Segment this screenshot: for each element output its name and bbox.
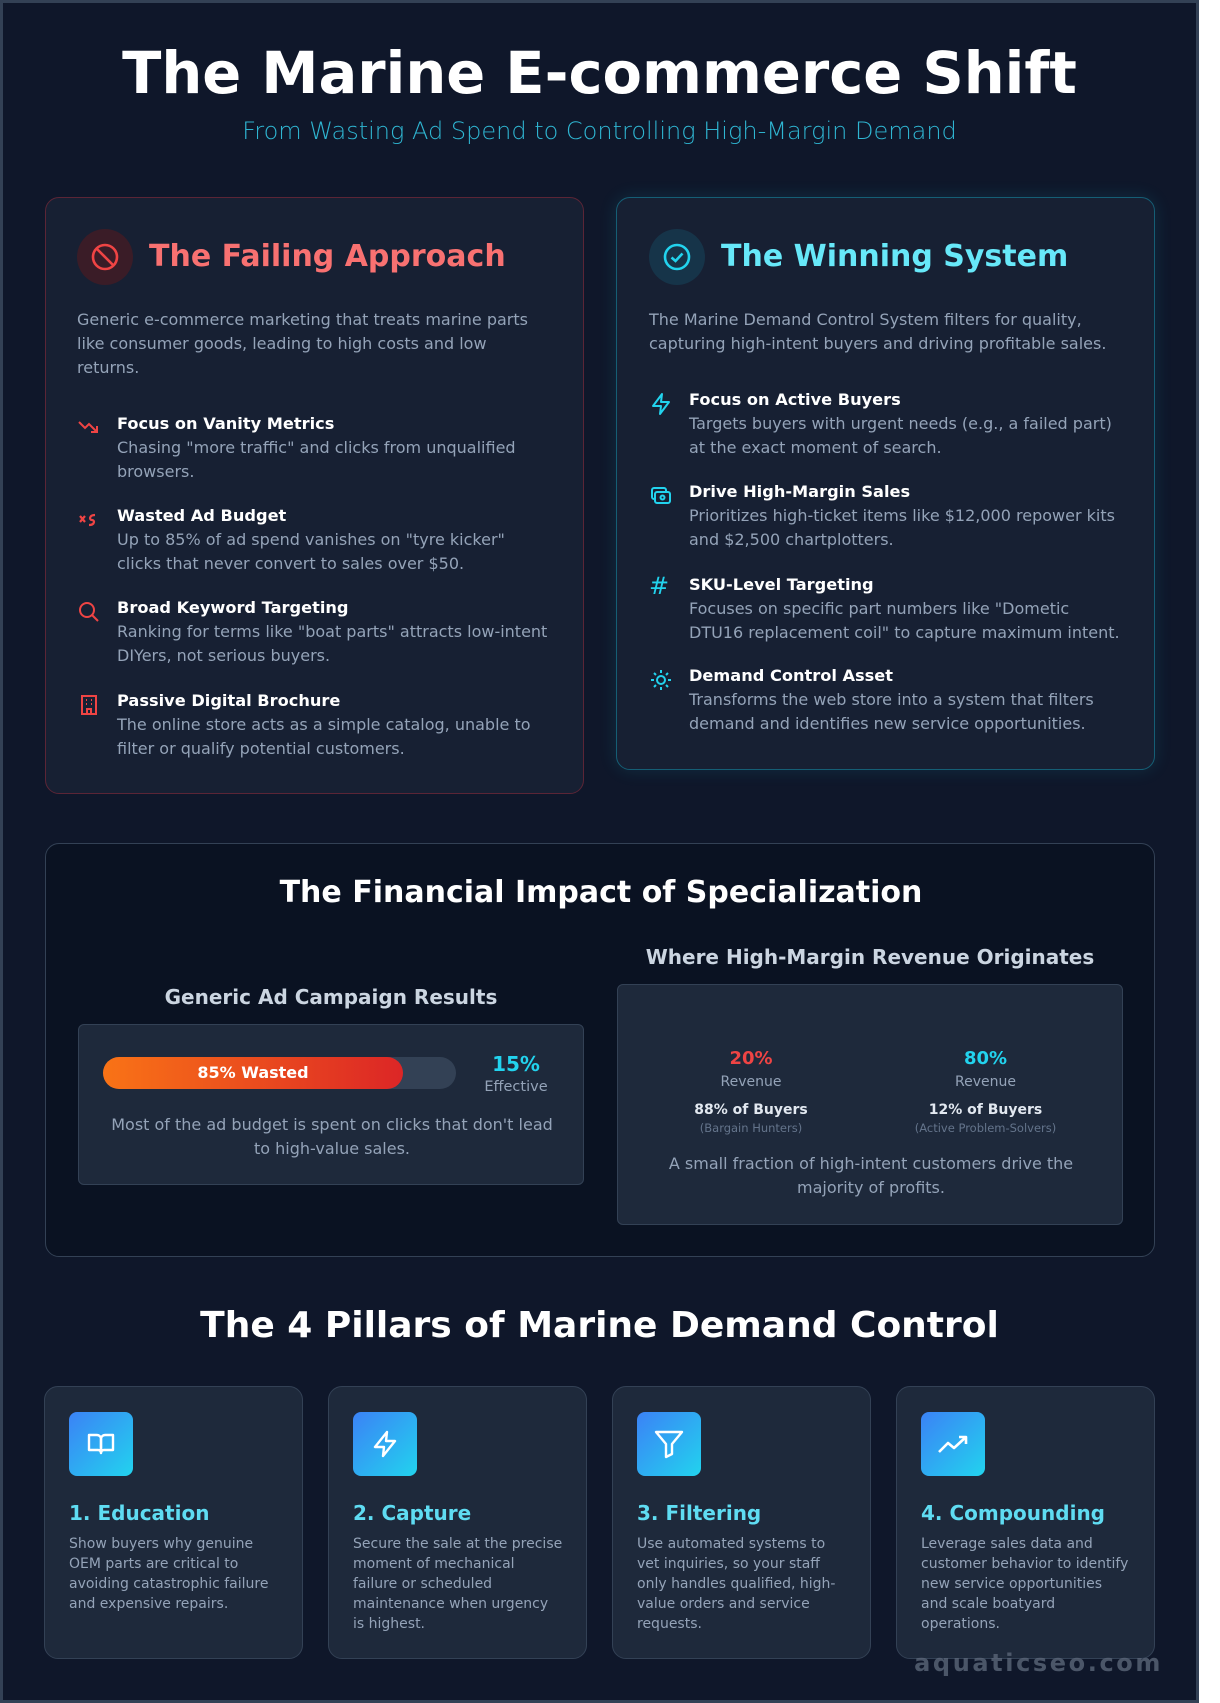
stat: active problem-solvers: (Active Problem-Solvers) [915, 1121, 1056, 1135]
icon: cash [651, 487, 671, 504]
pillar: filtering: Use automated systems to vet inquiries, so your staff only handles qualified, high-value orders and service requests. [637, 1536, 835, 1632]
stat: bargain hunters [694, 1048, 808, 1135]
pillar: compounding: Leverage sales data and customer behavior to identify new service opportunities and scale boatyard operations. [921, 1536, 1128, 1632]
stat: active problem-solvers: 80% [964, 1048, 1007, 1069]
pillar: education: 1. Education [69, 1501, 209, 1525]
caption: Most of the ad budget is spent on clicks that don't lead to high-value sales. [111, 1115, 553, 1158]
stat: active problem-solvers [915, 1048, 1056, 1135]
watermark: aquaticseo.com [914, 1649, 1163, 1677]
title: The Marine E-commerce Shift [122, 40, 1077, 107]
panel: financial impact [45, 843, 1155, 1257]
item: vanity metrics: Focus on Vanity Metrics [117, 414, 334, 433]
item: passive brochure: The online store acts as a simple catalog, unable to filter or qualify potential customers. [117, 715, 531, 758]
icon: trending up [921, 1412, 985, 1476]
item: active buyers [652, 390, 1112, 457]
chart: wasted bar box [78, 1024, 584, 1185]
pillar: capture [328, 1386, 587, 1659]
heading: The Financial Impact of Specialization [280, 875, 922, 910]
item: wasted budget [79, 506, 505, 573]
icon: bolt [353, 1412, 417, 1476]
caption: A small fraction of high-intent customers drive the majority of profits. [669, 1154, 1073, 1197]
heading: The Failing Approach [149, 239, 506, 274]
pillar: filtering [612, 1386, 871, 1659]
chart: revenue split box [617, 984, 1123, 1225]
item: demand control: Demand Control Asset [689, 666, 893, 685]
item: high margin [651, 482, 1115, 549]
panel: failing approach [45, 197, 584, 794]
subheading: generic campaign: Generic Ad Campaign Results [165, 985, 497, 1009]
item: sku targeting [649, 572, 1120, 642]
heading: 4 pillars: The 4 Pillars of Marine Demand Control [200, 1305, 999, 1346]
item: vanity metrics: Chasing "more traffic" and clicks from unqualified browsers. [117, 438, 516, 481]
item: broad keywords: Ranking for terms like "boat parts" attracts low-intent DIYers, not serious buyers. [117, 622, 547, 665]
stat: 15% effective [484, 1052, 548, 1095]
icon: search [79, 602, 99, 622]
pillar: education: Show buyers why genuine OEM parts are critical to avoiding catastrophic failure and expensive repairs. [69, 1536, 268, 1612]
pillar: filtering: 3. Filtering [637, 1501, 761, 1525]
icon: book [69, 1412, 133, 1476]
item: high margin: Drive High-Margin Sales [689, 482, 910, 501]
pillar: education [44, 1386, 303, 1659]
icon: bolt [652, 393, 670, 415]
item: passive brochure: Passive Digital Brochure [117, 691, 340, 710]
item: active buyers: Targets buyers with urgent needs (e.g., a failed part) at the exact moment of search. [689, 414, 1112, 457]
subtitle: From Wasting Ad Spend to Controlling High-Margin Demand [242, 117, 957, 145]
item: high margin: Prioritizes high-ticket items like $12,000 repower kits and $2,500 chartplotters. [689, 506, 1115, 549]
description: Generic e-commerce marketing that treats marine parts like consumer goods, leading to high costs and low returns. [77, 310, 528, 377]
icon: check circle [649, 229, 705, 285]
pillar: compounding: 4. Compounding [921, 1501, 1105, 1525]
item: sku targeting: Focuses on specific part numbers like "Dometic DTU16 replacement coil" to capture maximum intent. [689, 599, 1120, 642]
pillar: capture: Secure the sale at the precise moment of mechanical failure or scheduled maintenance when urgency is highest. [353, 1536, 562, 1632]
icon: money off [79, 514, 96, 526]
item: demand control [651, 666, 1094, 733]
item: broad keywords [79, 598, 547, 665]
item: vanity metrics [78, 414, 516, 481]
panel: winning system [616, 197, 1155, 770]
subheading: revenue origin: Where High-Margin Revenue Originates [646, 945, 1094, 969]
bar chart [103, 1057, 456, 1089]
item: passive brochure [81, 691, 531, 758]
bar chart: 85% Wasted [197, 1063, 309, 1082]
stat: 15% effective: 15% [492, 1052, 540, 1076]
icon: building [81, 695, 97, 715]
icon: sun/eye [651, 670, 671, 690]
item: wasted budget: Wasted Ad Budget [117, 506, 286, 525]
heading: The Winning System [721, 239, 1068, 274]
item: active buyers: Focus on Active Buyers [689, 390, 901, 409]
stat: bargain hunters: Revenue [720, 1074, 781, 1090]
stat: 15% effective: Effective [484, 1079, 548, 1095]
item: demand control: Transforms the web store into a system that filters demand and identifies new service opportunities. [689, 690, 1094, 733]
stat: active problem-solvers: 12% of Buyers [929, 1102, 1042, 1118]
item: wasted budget: Up to 85% of ad spend vanishes on "tyre kicker" clicks that never convert to sales over $50. [117, 530, 505, 573]
stat: bargain hunters: 88% of Buyers [694, 1102, 808, 1118]
description: The Marine Demand Control System filters for quality, capturing high-intent buyers and driving profitable sales. [649, 310, 1106, 353]
icon: ban circle [77, 229, 133, 285]
pillar: compounding [896, 1386, 1155, 1659]
item: broad keywords: Broad Keyword Targeting [117, 598, 348, 617]
stat: bargain hunters: (Bargain Hunters) [700, 1121, 802, 1135]
icon: hash: # [649, 572, 669, 600]
icon: trending down [78, 421, 98, 433]
pillar: capture: 2. Capture [353, 1501, 471, 1525]
icon: funnel [637, 1412, 701, 1476]
item: sku targeting: SKU-Level Targeting [689, 575, 874, 594]
stat: bargain hunters: 20% [729, 1048, 773, 1069]
stat: active problem-solvers: Revenue [955, 1074, 1016, 1090]
